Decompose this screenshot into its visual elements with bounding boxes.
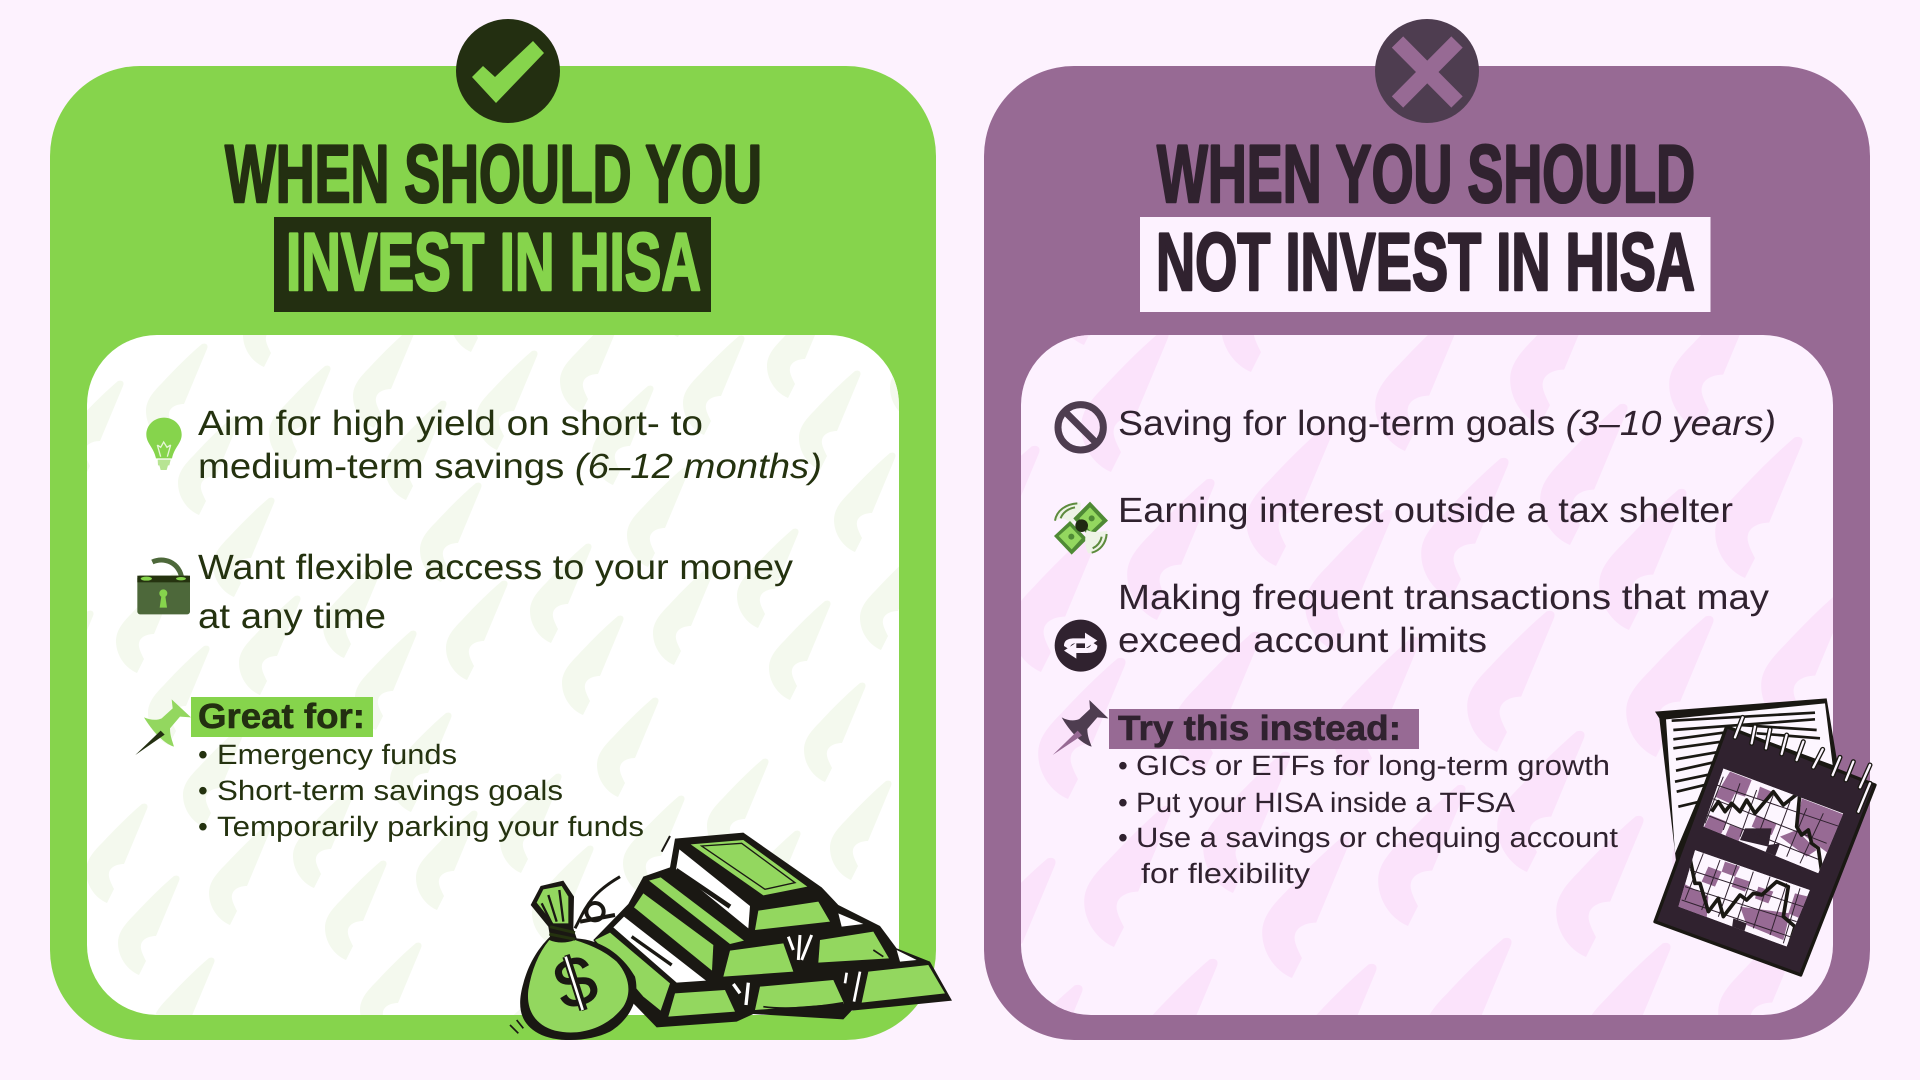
upper chart panel xyxy=(1703,768,1845,873)
highlight label: try this instead xyxy=(1109,709,1419,749)
panel: when not to invest in HISA xyxy=(952,19,1879,1080)
white content card xyxy=(87,335,899,1015)
list: alternatives: for flexibility xyxy=(1141,858,1310,889)
icon: purple push pin xyxy=(1053,700,1108,755)
text: frequent transactions: Making frequent transactions that may xyxy=(1118,578,1770,617)
text: long-term goals: Saving for long-term goals (3–10 years) xyxy=(1118,404,1776,443)
icon: open padlock xyxy=(137,560,190,614)
point: flexible access xyxy=(137,548,794,636)
list: alternatives: GICs or ETFs for long-term growth xyxy=(1136,750,1610,781)
text: high yield savings: Aim for high yield on short- to xyxy=(198,404,703,443)
panel: when to invest in HISA xyxy=(6,19,952,1080)
front notebook cover xyxy=(1655,727,1875,975)
list: great for items xyxy=(198,739,644,842)
list: alternatives: • xyxy=(1118,750,1128,781)
icon: green push pin xyxy=(135,699,191,755)
purple panel background xyxy=(984,66,1870,1040)
icon: check mark badge xyxy=(456,19,560,123)
icon: flying money xyxy=(1054,502,1108,555)
list: great for items: Emergency funds xyxy=(217,739,457,770)
money bag xyxy=(510,877,636,1040)
text: taxable interest: Earning interest outside a tax shelter xyxy=(1118,491,1733,530)
list: alternatives xyxy=(1118,750,1618,889)
heading: when you should not invest in HISA xyxy=(1140,129,1710,312)
illustration: gold bars and money bag xyxy=(510,833,952,1040)
heading: when should you invest in HISA: INVEST IN HISA xyxy=(286,217,701,308)
point: frequent transactions xyxy=(1055,578,1770,672)
list: alternatives: Put your HISA inside a TFSA xyxy=(1136,787,1515,818)
green panel background xyxy=(50,66,936,1040)
point: high yield savings: medium-term savings (6–12 months) xyxy=(198,447,822,486)
highlight label: great for xyxy=(191,697,373,737)
heading: when should you invest in HISA: WHEN SHOULD YOU xyxy=(225,129,762,220)
spiral binding xyxy=(1735,717,1870,812)
list: great for items: Short-term savings goals xyxy=(217,775,563,806)
list: great for items: • xyxy=(198,811,208,842)
icon: repeat arrows xyxy=(1055,620,1107,672)
callout: great for: Great for: xyxy=(198,697,365,736)
callout: try this instead: Try this instead: xyxy=(1118,709,1401,748)
list: alternatives: • xyxy=(1118,787,1128,818)
back page with lines xyxy=(1655,698,1838,867)
list: alternatives: • xyxy=(1118,822,1128,853)
illustration: notebook with stock charts xyxy=(1655,698,1875,975)
heading: when should you invest in HISA xyxy=(225,129,762,312)
list: great for items: Temporarily parking your funds xyxy=(217,811,644,842)
icon: prohibited sign xyxy=(1058,405,1103,450)
list: alternatives: Use a savings or chequing account xyxy=(1136,822,1618,853)
money bag: $ xyxy=(545,939,606,1025)
list: great for items: • xyxy=(198,739,208,770)
point: flexible access: at any time xyxy=(198,597,386,636)
point: long-term goals xyxy=(1058,404,1776,450)
icon: cross badge xyxy=(1375,19,1479,123)
point: taxable interest xyxy=(1054,491,1733,555)
pale content card xyxy=(1021,335,1833,1015)
icon: light bulb xyxy=(146,418,182,470)
callout: great for xyxy=(135,697,644,842)
list: great for items: • xyxy=(198,775,208,806)
lower chart panel xyxy=(1677,850,1810,948)
callout: try this instead xyxy=(1053,700,1618,889)
point: high yield savings xyxy=(146,404,822,486)
point: frequent transactions: exceed account limits xyxy=(1118,621,1487,660)
text: flexible access: Want flexible access to your money xyxy=(198,548,794,587)
gold bars xyxy=(593,833,952,1027)
